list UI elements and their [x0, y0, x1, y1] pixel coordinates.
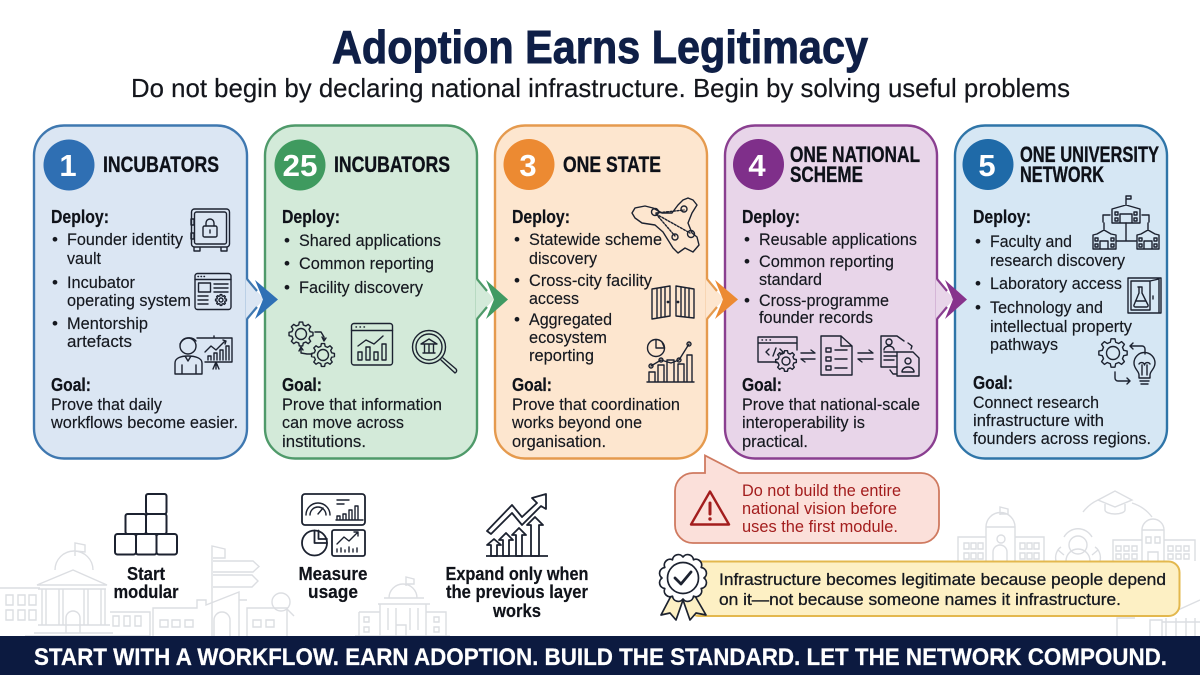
- deploy list: intellectual property: [990, 317, 1132, 336]
- heading: SCHEME: [790, 162, 863, 187]
- deploy list: •: [52, 314, 58, 333]
- label: [298, 564, 368, 602]
- deploy list: vault: [67, 249, 101, 268]
- icon: opening gates: [652, 286, 694, 319]
- icon: connected university campus: [1093, 196, 1159, 249]
- deploy list: Deploy:: [973, 207, 1031, 227]
- label: the previous layer: [446, 582, 588, 602]
- card background: [34, 126, 247, 458]
- panel: step 2 twenty-five incubators: [265, 126, 477, 458]
- goal: [282, 375, 442, 451]
- goal: workflows become easier.: [50, 413, 238, 432]
- subtitle: Do not begin by declaring national infrastructure. Begin by solving useful problems: [131, 73, 1070, 103]
- goal: Prove that information: [282, 395, 442, 414]
- icon: magnifier with institution: [412, 330, 457, 373]
- deploy list: Deploy:: [512, 207, 570, 227]
- deploy list: •: [284, 231, 290, 250]
- icon: code window, document and founder records flow: [758, 336, 919, 376]
- deploy list: •: [284, 254, 290, 273]
- statement text: on it—not because someone names it infrastructure.: [719, 590, 1121, 609]
- arrow: step 4 to step 5: [936, 279, 967, 319]
- goal: Prove that coordination: [512, 395, 680, 414]
- deploy list: standard: [759, 270, 822, 289]
- goal: Goal:: [282, 375, 322, 395]
- goal: [511, 375, 680, 451]
- number badge 1: 1: [59, 148, 77, 183]
- deploy list: Statewide scheme: [529, 230, 662, 249]
- deploy list: pathways: [990, 335, 1058, 354]
- deploy list: •: [52, 230, 58, 249]
- panel: step 4 one national scheme: [725, 126, 937, 458]
- icon: vault: [191, 209, 230, 251]
- goal: [742, 375, 920, 451]
- deploy list: [282, 207, 441, 297]
- label: [446, 564, 588, 621]
- number badge 5: [962, 139, 1014, 190]
- number badge 3: [504, 139, 554, 190]
- deploy list: Mentorship: [67, 314, 148, 333]
- deploy list: Aggregated: [529, 310, 612, 329]
- statement text: [719, 570, 1166, 609]
- deploy list: •: [975, 232, 981, 251]
- label: usage: [308, 582, 358, 602]
- deploy list: founder records: [759, 308, 873, 327]
- deploy list: reporting: [529, 346, 594, 365]
- number badge 1: [44, 140, 94, 190]
- number badge 4: [733, 139, 784, 190]
- heading: NETWORK: [1020, 162, 1105, 187]
- deploy list: Deploy:: [742, 207, 800, 227]
- card background: [495, 126, 707, 458]
- icon: operating system window: [195, 274, 231, 310]
- icon: rising growth arrows: [486, 494, 548, 556]
- card background: [725, 126, 937, 458]
- deploy list: •: [52, 273, 58, 292]
- principle: start modular: [114, 494, 178, 602]
- goal: can move across: [282, 413, 404, 432]
- yellow bar: [688, 562, 1180, 616]
- card background: [265, 126, 477, 458]
- heading: ONE NATIONAL: [790, 142, 920, 167]
- deploy list: Faculty and: [990, 232, 1072, 251]
- footer banner: [0, 636, 1200, 675]
- goal: works beyond one: [511, 413, 642, 432]
- deploy list: •: [514, 271, 520, 290]
- deploy list: [742, 207, 917, 327]
- icon: aggregated report chart: [647, 340, 694, 382]
- goal: Goal:: [51, 375, 91, 395]
- heading: INCUBATORS: [103, 152, 219, 177]
- goal: institutions.: [282, 432, 366, 451]
- deploy list: Founder identity: [67, 230, 183, 249]
- label: [114, 564, 178, 602]
- deploy list: •: [744, 291, 750, 310]
- label: modular: [114, 582, 178, 602]
- goal: Prove that national-scale: [742, 395, 920, 414]
- principle: measure usage: [298, 494, 368, 602]
- deploy list: •: [744, 230, 750, 249]
- icon: laboratory flask in doorway: [1128, 278, 1161, 313]
- goal: organisation.: [512, 432, 606, 451]
- deploy list: Deploy:: [282, 207, 340, 227]
- warning text: national vision before: [742, 499, 897, 518]
- warning text: [742, 481, 901, 536]
- label: Start: [127, 564, 165, 584]
- deploy list: [973, 207, 1132, 354]
- arrow: step 1 to step 2: [246, 279, 278, 319]
- icon: warning triangle: [691, 492, 729, 524]
- icon: certified award ribbon: [660, 555, 706, 620]
- deploy list: discovery: [529, 249, 597, 268]
- deploy list: Deploy:: [51, 207, 109, 227]
- deploy list: Cross-programme: [759, 291, 889, 310]
- heading: [1020, 142, 1159, 187]
- deploy list: Technology and: [990, 298, 1103, 317]
- number badge 25: 25: [282, 148, 318, 183]
- panel: step 5 one university network: [955, 126, 1167, 458]
- deploy list: research discovery: [990, 251, 1125, 270]
- deploy list: artefacts: [67, 332, 132, 351]
- speech bubble: [675, 456, 939, 543]
- icon: analytics window: [352, 324, 392, 365]
- callout: warning: [675, 456, 939, 543]
- statement text: Infrastructure becomes legitimate because people depend: [719, 570, 1166, 589]
- deploy list: Cross-city facility: [529, 271, 652, 290]
- warning text: uses the first module.: [742, 517, 898, 536]
- title: Adoption Earns Legitimacy: [332, 21, 868, 73]
- deploy list: •: [975, 298, 981, 317]
- deploy list: •: [284, 278, 290, 297]
- deploy list: Common reporting: [299, 254, 434, 273]
- deploy list: •: [514, 310, 520, 329]
- card background: [955, 126, 1167, 458]
- icon: gear and idea bulb cycle: [1099, 339, 1155, 384]
- goal: practical.: [742, 432, 808, 451]
- deploy list: •: [975, 274, 981, 293]
- deploy list: •: [744, 252, 750, 271]
- number badge 4: 4: [748, 148, 766, 183]
- panel: step 1 incubators: [34, 126, 247, 458]
- icon: mentor with presentation board: [175, 336, 232, 374]
- heading: INCUBATORS: [334, 152, 450, 177]
- number badge 3: 3: [519, 148, 537, 183]
- deploy list: ecosystem: [529, 328, 607, 347]
- deploy list: •: [514, 230, 520, 249]
- deploy list: access: [529, 289, 579, 308]
- deploy list: Facility discovery: [299, 278, 423, 297]
- label: Expand only when: [446, 564, 588, 584]
- goal: founders across regions.: [973, 429, 1151, 448]
- goal: [973, 373, 1151, 448]
- number badge 5: 5: [978, 148, 996, 183]
- goal: Goal:: [973, 373, 1013, 393]
- goal: Goal:: [742, 375, 782, 395]
- goal: interoperability is: [742, 413, 865, 432]
- deploy list: [51, 207, 191, 351]
- deploy list: [512, 207, 662, 365]
- icon: connected gears: [289, 322, 334, 366]
- callout: legitimacy statement: [660, 555, 1180, 620]
- goal: Connect research: [973, 393, 1099, 412]
- principle: expand only when the previous layer works: [446, 494, 588, 621]
- goal: Prove that daily: [51, 395, 162, 414]
- heading: ONE STATE: [563, 152, 661, 177]
- deploy list: Shared applications: [299, 231, 441, 250]
- heading: [790, 142, 920, 187]
- number badge 25: [274, 140, 326, 190]
- warning text: Do not build the entire: [742, 481, 901, 500]
- icon: state map with pins: [632, 198, 699, 253]
- goal: Goal:: [512, 375, 552, 395]
- goal: [50, 375, 238, 432]
- background watermark: right campus skyline: [958, 491, 1200, 636]
- icon: stacked blocks: [115, 494, 177, 554]
- label: Measure: [298, 564, 368, 584]
- arrow: step 2 to step 3: [476, 279, 508, 319]
- icon: dashboard, pie and trend: [302, 494, 365, 556]
- goal: infrastructure with: [973, 411, 1104, 430]
- panel: step 3 one state: [495, 126, 707, 458]
- label: works: [492, 601, 541, 621]
- deploy list: Incubator: [67, 273, 135, 292]
- deploy list: Reusable applications: [759, 230, 917, 249]
- background watermark: left campus skyline: [0, 543, 450, 636]
- deploy list: operating system: [67, 291, 191, 310]
- arrow: step 3 to step 4: [706, 279, 738, 319]
- deploy list: Laboratory access: [990, 274, 1122, 293]
- deploy list: Common reporting: [759, 252, 894, 271]
